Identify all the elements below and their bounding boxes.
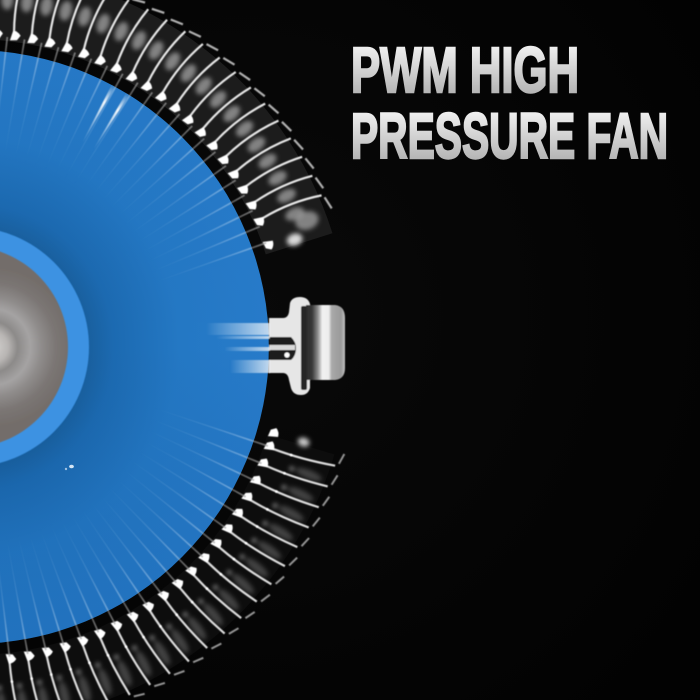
clip light streaks: [206, 323, 270, 373]
clip dark slit: [301, 306, 307, 390]
metal hub: [0, 246, 68, 448]
title line 1: PWM HIGH: [351, 34, 579, 106]
lower fin reflections: [0, 436, 323, 700]
disc lower shading: [0, 50, 269, 644]
hub ring: [0, 227, 89, 467]
dust specks: [65, 465, 74, 470]
lower fin base band: [0, 444, 301, 690]
upper fin base band: [0, 4, 299, 244]
blue fan disc: [0, 50, 269, 644]
lower heatsink fins: [0, 426, 344, 700]
clip slot bar: [269, 345, 295, 350]
title: [351, 34, 668, 172]
motion light rays on disc: [0, 35, 268, 658]
clip roller: [306, 305, 345, 380]
upper heatsink fins: [0, 0, 332, 251]
upper fin reflections: [0, 0, 321, 248]
clip body: [269, 297, 310, 395]
clip slot: [269, 337, 296, 360]
lower fin blades: [0, 426, 344, 700]
clip rivet: [284, 352, 290, 358]
upper fin blades: [0, 0, 332, 251]
metal mounting clip: [269, 297, 345, 395]
fan graphic: [0, 0, 345, 700]
